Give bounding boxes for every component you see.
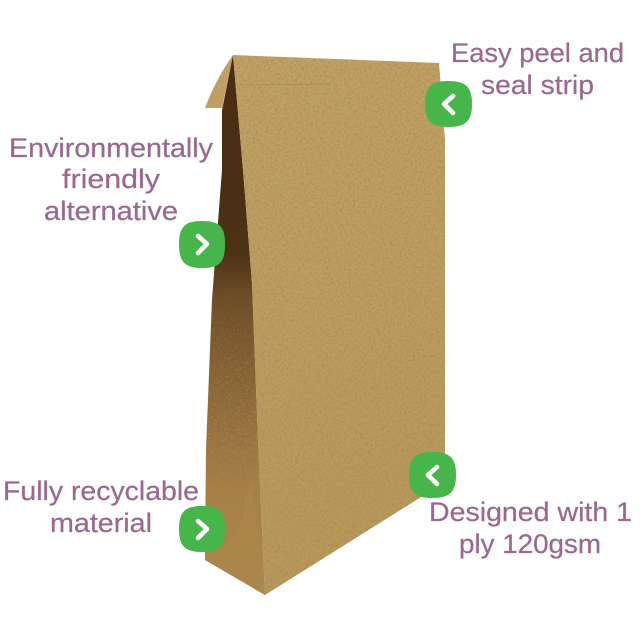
label: friendly: [62, 164, 161, 194]
callout: environmentally friendly alternative: [9, 133, 225, 268]
front panel: [233, 55, 445, 595]
label: Fully recyclable: [3, 476, 199, 506]
icon: left chevron button: [409, 452, 456, 498]
kraft paper bag: [205, 55, 445, 595]
icon: right chevron button: [179, 221, 225, 268]
folded flap back: [205, 55, 233, 108]
label: seal strip: [481, 70, 594, 100]
label: Easy peel and: [451, 38, 624, 68]
callout: fully recyclable material: [3, 476, 225, 552]
label: [3, 476, 199, 538]
label: Designed with 1: [429, 497, 632, 527]
callout: designed with 1 ply 120gsm: [409, 452, 632, 559]
side gusset: [205, 55, 265, 595]
paper grain: front: [233, 55, 445, 595]
callout: easy peel and seal strip: [425, 38, 624, 127]
label: alternative: [44, 196, 178, 226]
paper grain: gusset: [205, 270, 265, 595]
label: ply 120gsm: [459, 529, 601, 559]
gusset bottom fold: [205, 480, 265, 595]
icon: right chevron button: [179, 506, 225, 552]
label: [429, 497, 632, 559]
seal strip crease: [236, 84, 330, 85]
label: Environmentally: [9, 133, 214, 163]
icon: left chevron button: [425, 81, 472, 127]
label: [451, 38, 624, 100]
label: material: [50, 508, 152, 538]
label: [9, 133, 214, 226]
